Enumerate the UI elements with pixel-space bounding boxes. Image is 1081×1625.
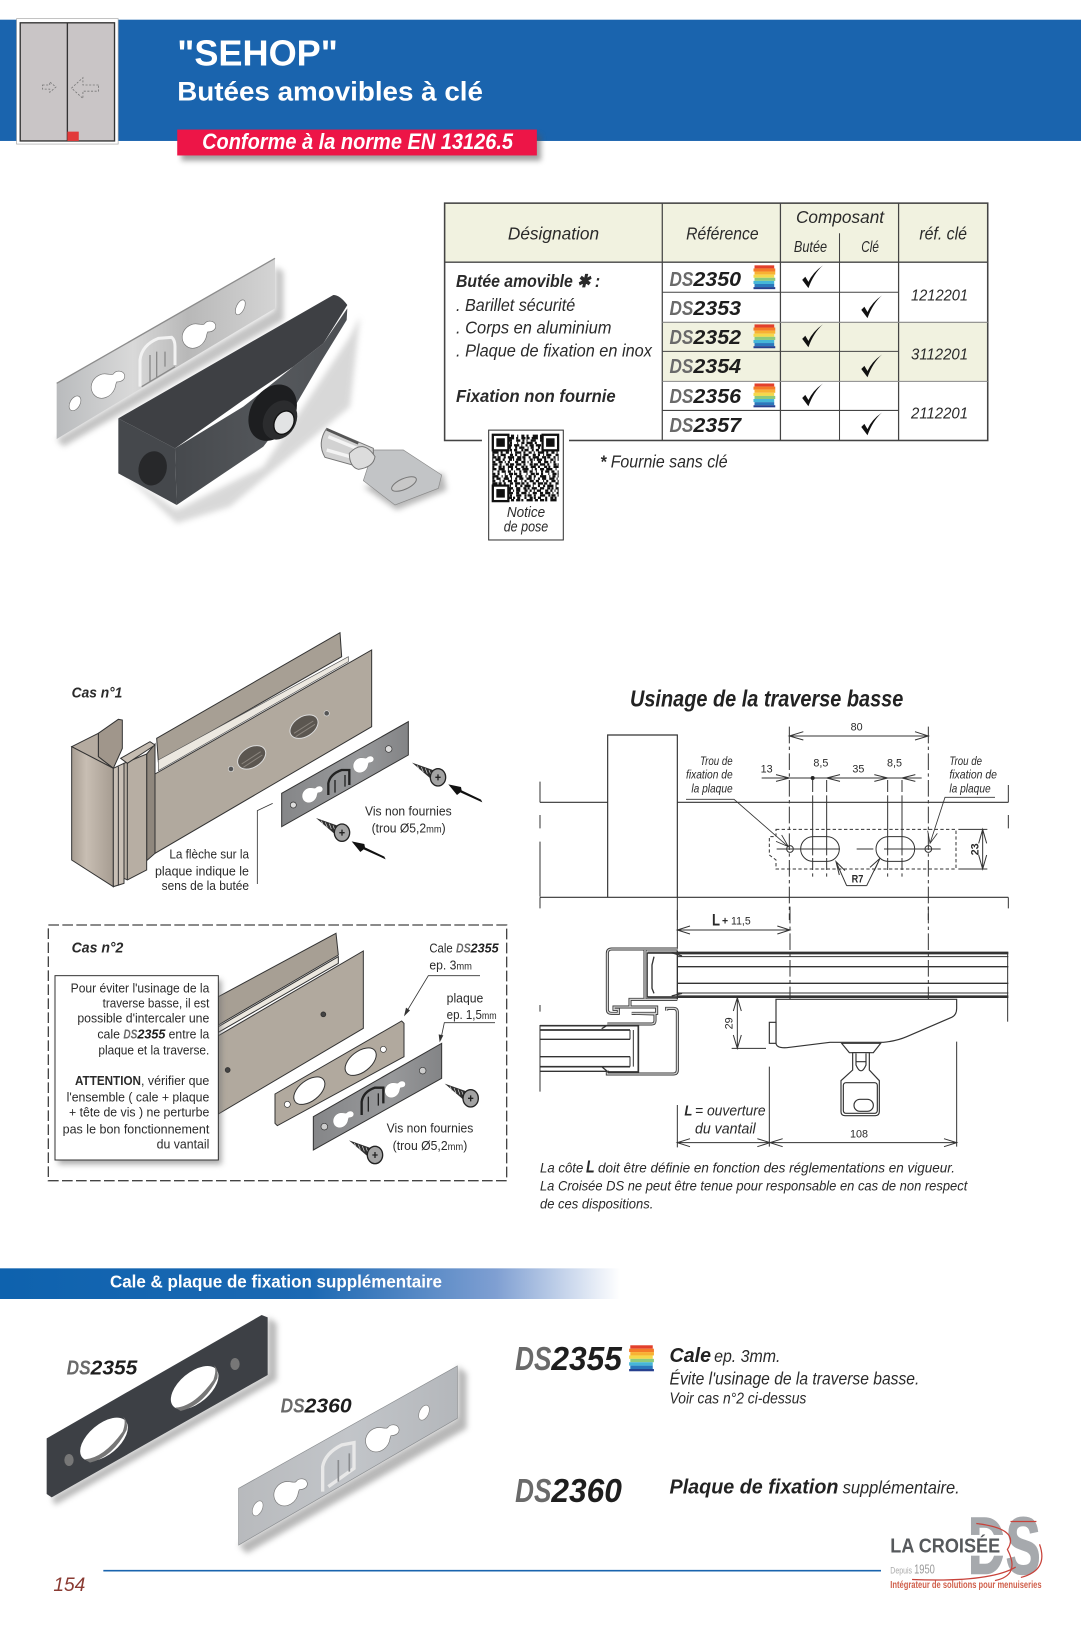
- callout: instructions: DS: [123, 1026, 138, 1041]
- page number: 154: [53, 1575, 86, 1596]
- description: DS2355: Cale: [670, 1344, 711, 1367]
- heading: usinage: Usinage de la traverse basse: [630, 686, 903, 712]
- regulation note: La côte: [540, 1159, 584, 1175]
- heading: cas 1: Cas n°1: [72, 685, 122, 702]
- dimension values: 13: [761, 764, 773, 776]
- table headings: réf. clé: [919, 223, 967, 243]
- technical drawing: section view: [540, 907, 1008, 1211]
- callout: instructions: l'ensemble ( cale + plaque: [67, 1089, 209, 1104]
- description: DS2360: Plaque de fixation: [670, 1475, 838, 1498]
- logo: La Croisée DS: [890, 1501, 1042, 1591]
- screws note: Vis non fournies: [365, 804, 452, 819]
- key references: 1212201: [911, 288, 968, 305]
- frame upper section: [607, 949, 682, 1074]
- body shadow: [123, 317, 360, 523]
- callout: instructions: traverse basse, il est: [103, 996, 210, 1011]
- reference codes: 2354: [692, 355, 742, 378]
- icon: door with stop position: [17, 19, 118, 144]
- QR finder squares: [493, 435, 558, 501]
- key references: 2112201: [910, 406, 968, 423]
- spacer DS2355: [275, 1021, 404, 1126]
- dimension values: 35: [852, 764, 864, 776]
- aluminium body: [118, 295, 347, 505]
- table headings: Référence: [686, 223, 759, 243]
- fixing plate: [313, 1043, 442, 1150]
- product: DS2360 plate: [239, 1366, 467, 1553]
- reference codes: DS: [670, 414, 694, 437]
- label: cale: DS: [456, 941, 471, 956]
- rail inner strip: [158, 657, 348, 771]
- front view outline: [540, 735, 1008, 920]
- L opening note: = ouverture: [695, 1104, 766, 1120]
- reference codes: 2357: [692, 414, 743, 437]
- key profile: [841, 1053, 879, 1116]
- label: DS2355: 2355: [90, 1357, 138, 1379]
- description: DS2355: 2355: [550, 1341, 622, 1378]
- label: cale: 2355: [470, 941, 499, 956]
- arrow note: plaque indique le: [155, 864, 249, 879]
- dimensions: [762, 732, 987, 886]
- L opening note: [684, 1104, 766, 1137]
- note: right fixing hole: [928, 754, 997, 843]
- dimension values: R7: [852, 874, 863, 886]
- regulation note: [540, 1156, 968, 1211]
- reference codes: 2352: [692, 326, 742, 349]
- lower dimensions: [677, 998, 957, 1147]
- arrow note: sens de la butée: [162, 878, 249, 893]
- note: left fixing hole: Trou de: [700, 754, 733, 768]
- dimension values: 29: [723, 1017, 735, 1029]
- callout: instructions: possible d'intercaler une: [77, 1011, 209, 1026]
- label: cale: ep. 3mm: [429, 957, 472, 972]
- QR notice box: [482, 430, 569, 540]
- section: cale and plate: [0, 1268, 881, 1596]
- description: DS2355: Évite l'usinage de la traverse basse.: [670, 1369, 919, 1389]
- key references: 3112201: [911, 347, 968, 364]
- L opening note: du vantail: [695, 1121, 756, 1137]
- reference codes: 2356: [692, 385, 742, 408]
- rail: [218, 933, 363, 1114]
- table headings: [508, 207, 967, 256]
- reference codes: [670, 268, 743, 437]
- callout: instructions: du vantail: [157, 1136, 209, 1151]
- frame post: [72, 719, 155, 887]
- designation text: Butée amovible ✱ :: [456, 271, 600, 291]
- label: DS2355: [67, 1357, 138, 1379]
- regulation note: La Croisée DS ne peut être tenue pour responsable en cas de non respect: [540, 1177, 968, 1193]
- heading: cas 2: Cas n°2: [72, 940, 124, 957]
- callout: instructions: [55, 976, 222, 1164]
- plate shadow: [57, 267, 283, 447]
- dimension L+11.5: + 11,5: [722, 916, 751, 928]
- fixing plate: [57, 258, 275, 439]
- screws note: (trou Ø5,2mm): [372, 820, 446, 835]
- product table: [445, 203, 988, 540]
- label: DS2360: 2360: [304, 1396, 352, 1418]
- description: DS2360: supplémentaire.: [843, 1477, 960, 1497]
- reference codes: DS: [670, 297, 694, 320]
- designation text: [456, 271, 653, 406]
- reference codes: DS: [670, 326, 694, 349]
- subtitle: Butées amovibles à clé: [177, 77, 483, 107]
- footer line: [103, 1568, 881, 1573]
- callout: instructions: entre la: [169, 1026, 210, 1041]
- dashed frame: [48, 925, 507, 1181]
- designation text: Fixation non fournie: [456, 386, 616, 406]
- title: "SEHOP": [177, 32, 338, 73]
- table headings: Clé: [861, 239, 879, 256]
- dimension values: 8,5: [887, 758, 902, 770]
- reference codes: 2353: [692, 297, 742, 320]
- table header background: [445, 203, 988, 262]
- icon: colour swatches: [753, 265, 775, 407]
- product descriptions: [515, 1341, 1042, 1591]
- key shadow: [363, 473, 447, 510]
- fixing plate: [282, 722, 408, 827]
- frame lower section: [540, 1005, 638, 1092]
- label: plaque: [439, 990, 497, 1042]
- description: DS2355: Voir cas n°2 ci-dessus: [670, 1390, 807, 1407]
- designation text: . Plaque de fixation en inox: [456, 341, 653, 361]
- reference codes: DS: [670, 385, 694, 408]
- push button: [135, 448, 171, 489]
- note: left fixing hole: [686, 754, 788, 847]
- description: DS2360: [515, 1473, 960, 1510]
- dimension L+11.5: L: [712, 910, 720, 929]
- label: plaque: ep. 1,5mm: [447, 1007, 497, 1022]
- screws note: [387, 1120, 474, 1153]
- logo: La Croisée DS: LA CROISÉE: [890, 1535, 1000, 1558]
- callout: instructions: Pour éviter l'usinage de la: [71, 980, 210, 995]
- axis lines: [789, 727, 928, 920]
- L opening note: L: [684, 1104, 692, 1120]
- section band: [0, 1268, 620, 1299]
- screws note: Vis non fournies: [387, 1120, 474, 1135]
- dimension values: [723, 1017, 868, 1141]
- callout: instructions: plaque et la traverse.: [98, 1042, 209, 1057]
- lock cylinder: [239, 376, 307, 450]
- label: DS2360: DS: [281, 1396, 305, 1418]
- screws: [349, 1084, 478, 1164]
- technical drawing: usinage: [540, 686, 1008, 920]
- logo: La Croisée DS: 1950: [914, 1562, 935, 1576]
- label: DS2355: DS: [67, 1357, 91, 1379]
- designation text: . Corps en aluminium: [456, 318, 611, 338]
- label: plaque: plaque: [447, 990, 483, 1005]
- callout: instructions: ATTENTION: [75, 1073, 141, 1088]
- arrows: [352, 784, 482, 859]
- panel: cas n°1: [72, 633, 482, 893]
- highlighted rows: [662, 322, 988, 381]
- screws note: (trou Ø5,2mm): [393, 1138, 467, 1153]
- product: DS2355 spacer: [47, 1315, 277, 1505]
- logo: La Croisée DS: DS: [968, 1501, 1041, 1591]
- description: DS2360: DS: [515, 1473, 551, 1510]
- reference codes: 2350: [692, 268, 742, 291]
- dimension L+11.5: [677, 907, 928, 1032]
- dimension values: 108: [850, 1129, 868, 1141]
- screws note: [365, 804, 452, 835]
- label: cale: Cale: [429, 941, 453, 956]
- screws: [316, 763, 446, 841]
- QR notice box: de pose: [504, 520, 548, 536]
- arrow note: La flèche sur la: [169, 846, 250, 861]
- dimension values: 23: [969, 843, 981, 855]
- regulation note: doit être définie en fonction des réglementations en vigueur.: [598, 1159, 955, 1175]
- reference codes: DS: [670, 355, 694, 378]
- callout: instructions: , vérifier que: [141, 1073, 209, 1088]
- footnote: * Fournie sans clé: [600, 451, 728, 471]
- norm badge: Conforme à la norme EN 13126.5: [202, 129, 514, 154]
- QR caption: Notice: [507, 505, 545, 521]
- description: DS2355: DS: [515, 1341, 551, 1378]
- reference codes: DS: [670, 268, 694, 291]
- callout: instructions: cale: [97, 1026, 120, 1041]
- key: [321, 428, 442, 505]
- rail front face: [155, 650, 372, 853]
- slots and plate outline: [769, 780, 956, 877]
- note: left fixing hole: fixation de: [686, 768, 733, 782]
- table headings: Composant: [796, 207, 885, 227]
- icon: check marks: [802, 265, 882, 435]
- note: right fixing hole: Trou de: [949, 754, 982, 768]
- header band: [0, 20, 1081, 141]
- description: DS2355: ep. 3mm.: [714, 1346, 780, 1366]
- product photo: butée, plaque and key: [57, 258, 447, 523]
- dimension values: [761, 722, 981, 886]
- note: right fixing hole: la plaque: [949, 782, 991, 796]
- designation text: . Barillet sécurité: [456, 295, 575, 315]
- rail back flange: [157, 633, 342, 762]
- table grid: [445, 203, 988, 440]
- note: left fixing hole: la plaque: [691, 782, 733, 796]
- key references: [910, 288, 968, 423]
- label: cale: [404, 941, 499, 1016]
- dimension values: 80: [851, 722, 863, 734]
- table headings: Butée: [794, 239, 827, 256]
- panel: cas n°2: [48, 925, 507, 1181]
- dimension values: 8,5: [813, 758, 828, 770]
- callout: instructions: pas le bon fonctionnement: [63, 1121, 210, 1136]
- door rail section: [677, 952, 1008, 1022]
- table headings: Désignation: [508, 223, 599, 243]
- page header: [0, 19, 1081, 161]
- regulation note: de ces dispositions.: [540, 1195, 653, 1211]
- description: DS2360: 2360: [550, 1473, 622, 1510]
- callout: instructions: 2355: [136, 1026, 166, 1041]
- label: DS2360: [281, 1396, 352, 1418]
- QR code: [492, 436, 559, 500]
- callout: instructions: + tête de vis ) ne perturbe: [69, 1105, 209, 1120]
- regulation note: L: [586, 1156, 595, 1176]
- description: DS2355: [515, 1341, 919, 1407]
- section band: Cale & plaque de fixation supplémentaire: [110, 1271, 442, 1291]
- logo: La Croisée DS: Depuis: [890, 1565, 912, 1575]
- note: right fixing hole: fixation de: [949, 768, 997, 782]
- stop body profile: [769, 999, 957, 1053]
- arrow note: [155, 803, 273, 893]
